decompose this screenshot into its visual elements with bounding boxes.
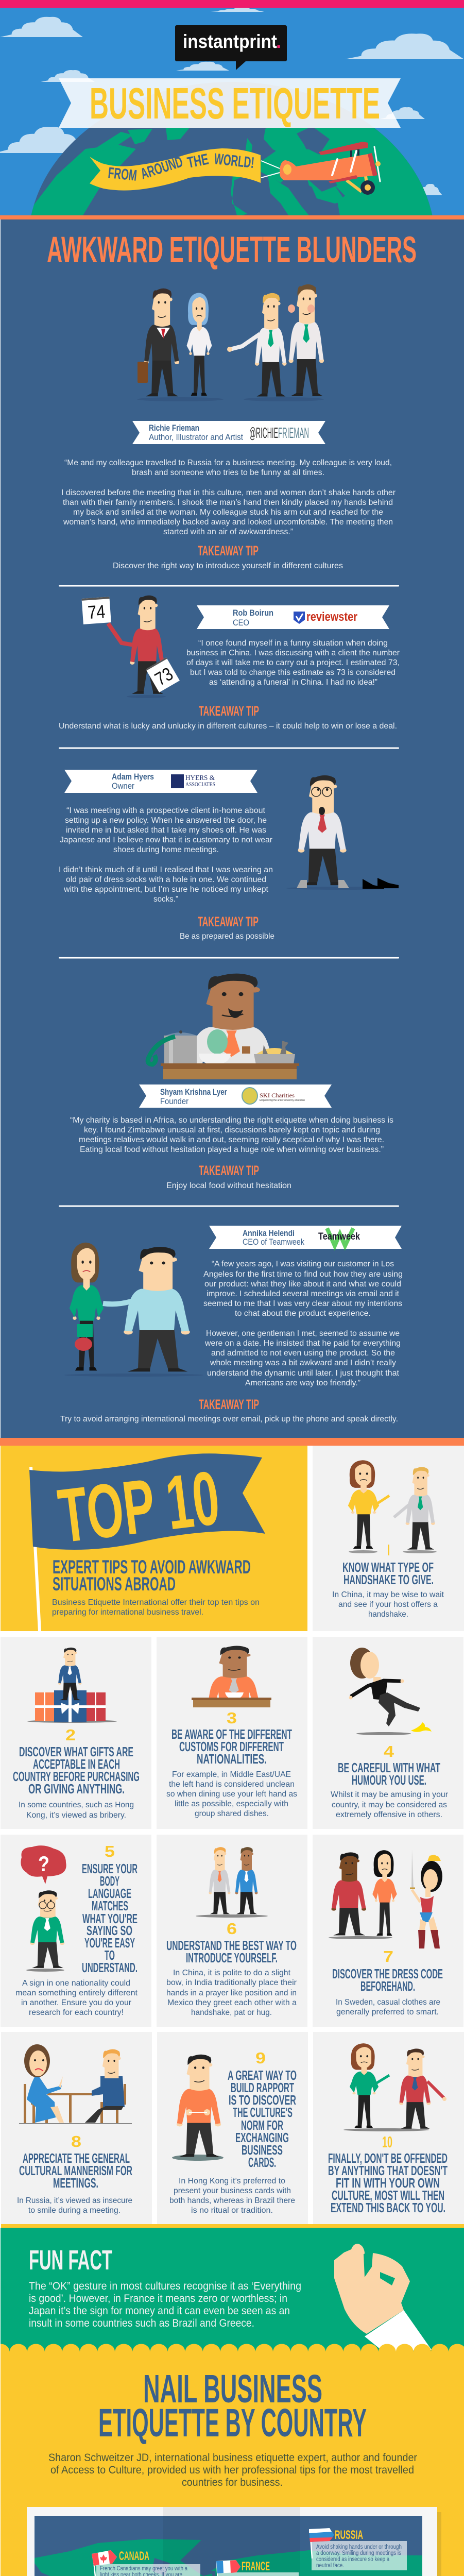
subtitle flag: from around the world: FROM — [107, 164, 138, 184]
map callout: Russia: RUSSIA — [335, 2528, 363, 2542]
panel: tip 5 body language: BODY — [100, 1873, 119, 1889]
text: OK gesture fact: The “OK” gesture in most cultures recognise it as ‘Everything — [29, 2280, 301, 2292]
map frame with shadow — [27, 2507, 441, 2576]
takeaway tip 2: TAKEAWAY TIP — [199, 703, 259, 719]
panel: tip 3 customs: the left hand is considered unclean — [169, 1780, 295, 1789]
text: Sharon Schweitzer intro: Sharon Schweitzer JD, international business etiquette expert, author and founder — [48, 2452, 417, 2464]
panel: tip 5 body language: A sign in one nationality could — [22, 1979, 130, 1988]
heading: nail business etiquette by country: NAIL BUSINESS — [143, 2367, 322, 2411]
panel: tip 5 body language: YOU'RE EASY — [84, 1935, 135, 1951]
quote: Richie Frieman: brash and someone who tries to be funny at all times. — [132, 468, 324, 477]
panel: tip 8 mannerism: APPRECIATE THE GENERAL — [23, 2150, 130, 2166]
panel: tip 3 customs: little as possible, especially with — [175, 1800, 288, 1808]
illustration: woman and leaning man — [64, 1243, 203, 1377]
quote: Rob Boirun — [186, 639, 400, 687]
panel: tip 9 business cards: 9 — [255, 2049, 266, 2067]
quote: Annika Helendi: understand the dynamic until later. I just thought that — [207, 1369, 400, 1378]
section divider: orange — [0, 1438, 464, 1446]
quote: Annika Helendi: However, one gentleman I met, seemed to assume we — [206, 1329, 400, 1338]
ribbon: Richie Frieman: @RICHIE — [249, 425, 278, 442]
panel: tip 2 gifts: 2 — [65, 1726, 76, 1744]
panel: tip 9 business cards: BUILD RAPPORT — [231, 2080, 294, 2095]
quote: Annika Helendi: and admitted to not even using the product. So the — [211, 1349, 395, 1358]
panel: tip 9 business cards: In Hong Kong it’s preferred to — [179, 2177, 285, 2185]
panel: tip 9 business cards: EXCHANGING — [235, 2130, 289, 2145]
map: world map — [35, 2516, 422, 2576]
ribbon: Adam Hyers: Owner — [112, 782, 134, 791]
text: OK gesture fact: Japan it’s the sign for money and it can even be seen as an — [29, 2305, 290, 2317]
subtitle flag: from around the world — [90, 148, 261, 191]
panel: tip 2 gifts: DISCOVER WHAT GIFTS ARE — [19, 1744, 133, 1759]
quote: Adam Hyers: invited me in but asked that I take my shoes off. He was — [66, 826, 266, 835]
panel: tip 5 body language: mean something entirely different — [15, 1989, 138, 1997]
panel: tip 9 business cards: CARDS. — [248, 2155, 276, 2170]
quote: Rob Boirun: business in China. I was discussing with a client the number — [186, 649, 400, 657]
quote: Annika Helendi: our product: what they like about it and what we could — [204, 1280, 401, 1289]
quote: Richie Frieman: “Me and my colleague travelled to Russia for a business meeting. My colleague is very loud, — [64, 459, 392, 467]
takeaway tip 4: Enjoy local food without hesitation — [166, 1181, 291, 1190]
panel: tip 9 business cards: A GREAT WAY TO — [228, 2067, 297, 2083]
text: expert tips intro: SITUATIONS ABROAD — [53, 1573, 176, 1595]
panel: tip 6 introduce: handshake, pat or hug. — [191, 2008, 272, 2017]
map callout: Canada — [92, 2549, 200, 2576]
panel: tip 3 customs: For example, in Middle East/UAE — [172, 1770, 291, 1779]
quote: Annika Helendi: seemed to me that I was very clear about my intentions — [203, 1299, 402, 1308]
panel: fun fact background — [1, 2228, 464, 2351]
panel: tip 8 mannerism: 8 — [71, 2132, 81, 2150]
panel: tip 2 gifts — [1, 1637, 151, 1829]
panel: tip 6 introduce: hands in a prayer like position and in — [166, 1989, 297, 1997]
illustration: man holding calendars 74 and 73 — [81, 596, 180, 698]
panel: tip 3 customs — [157, 1637, 307, 1829]
panel: tip 4 humour — [313, 1637, 463, 1829]
text: expert tips intro — [52, 1556, 260, 1617]
panel: tip 9 business cards: IS TO DISCOVER — [229, 2092, 296, 2108]
panel: tip 9 business cards: both hands, whereas in Brazil there — [169, 2196, 295, 2205]
logo: instantprint speech bubble — [175, 25, 287, 70]
logo: instantprint speech bubble: . — [276, 31, 281, 52]
panel: tip 4 humour: Whilst it may be amusing in your — [331, 1790, 448, 1799]
ribbon: Shyam Krishna Lyer: SKI Charities — [260, 1092, 295, 1099]
ribbon: Richie Frieman: Richie Frieman — [149, 423, 199, 433]
map callout: Russia: Avoid shaking hands under or through — [316, 2544, 402, 2550]
panel: tip 9 business cards — [157, 2032, 308, 2224]
quote: Richie Frieman: I discovered before the meeting that in this culture, men and women don’t shake hands other — [61, 488, 396, 497]
quote: Shyam Krishna Lyer: meetings relatives would walk in and out, seeming really sceptical of why I was there. — [79, 1136, 384, 1144]
panel: tip 7 dress code: 7 — [383, 1947, 393, 1965]
panel: tip 8 mannerism: to smile during a meeting. — [28, 2206, 121, 2215]
ribbon: Adam Hyers: HYERS & — [185, 774, 215, 782]
quote: Shyam Krishna Lyer: Eating local food without hesitation played a huge role when winning over business.” — [80, 1145, 384, 1154]
panel: tip 5 body language: ENSURE YOUR — [82, 1861, 138, 1876]
flag: top 10: TOP 10 — [54, 1455, 224, 1559]
panel: tip 4 humour: 4 — [384, 1742, 394, 1760]
ribbon: Rob Boirun: reviewster — [306, 610, 357, 624]
takeaway tip 1: Discover the right way to introduce yourself in different cultures — [113, 562, 343, 570]
hero: sky background with clouds — [0, 8, 464, 216]
quote: Rob Boirun: of days it will take me to carry out a project. I estimated 73, — [186, 658, 400, 667]
panel: tip 9 business cards: is no ritual or tradition. — [191, 2206, 273, 2215]
panel: tip 7 dress code: generally preferred to smart. — [336, 2008, 439, 2016]
ribbon: Adam Hyers: ASSOCIATES — [185, 781, 215, 788]
takeaway tip 1: TAKEAWAY TIP — [198, 543, 259, 558]
quote: Annika Helendi: were on a date. He insisted that he paid for everything — [204, 1339, 401, 1348]
icon: biplane — [261, 142, 381, 195]
panel: tip 4 humour: country, it may be considered as — [332, 1801, 447, 1809]
panel: tip 2 gifts: OR GIVING ANYTHING. — [28, 1781, 125, 1797]
text: Sharon Schweitzer intro — [48, 2452, 417, 2488]
panel: tip 3 customs: NATIONALITIES. — [197, 1751, 267, 1767]
quote: Adam Hyers: setting up a new policy. When he answered the door, he — [65, 816, 267, 825]
quote: Adam Hyers — [59, 806, 273, 904]
ribbon: Rob Boirun — [197, 605, 389, 629]
ribbon: Rob Boirun: CEO — [233, 618, 249, 628]
heading: nail business etiquette by country — [98, 2367, 367, 2445]
panel: tip 6 introduce — [157, 1835, 307, 2027]
quote: Annika Helendi: to chat about the product experience. — [235, 1309, 371, 1318]
map callout: France — [216, 2560, 299, 2576]
quote: Rob Boirun: “I once found myself in a funny situation when doing — [198, 639, 388, 648]
panel: tip 1 handshake: In China, it may be wise to wait — [332, 1590, 444, 1599]
icon: OK hand gesture — [334, 2244, 432, 2352]
panel: tip 7 dress code: In Sweden, casual clothes are — [336, 1998, 440, 2007]
takeaway tip 3 — [180, 914, 274, 941]
panel: tip 8 mannerism: MEETINGS. — [53, 2175, 98, 2191]
quote: Annika Helendi: Angeles for the first time to find out how they are using — [203, 1270, 403, 1279]
ribbon: Adam Hyers: Adam Hyers — [112, 772, 154, 782]
panel: tip 10 don't be offended — [313, 2032, 464, 2224]
quote: Rob Boirun: as ‘attending a funeral’ in China. I had no idea!” — [209, 678, 377, 687]
panel: tip 9 business cards: present your business cards with — [174, 2187, 291, 2195]
map callout: Russia: neutral face. — [316, 2563, 344, 2569]
section divider: yellow — [1, 2224, 464, 2228]
panel: tip 5 body language — [1, 1835, 151, 2027]
panel: tip 3 customs: BE AWARE OF THE DIFFERENT — [171, 1726, 292, 1742]
quote: Adam Hyers: old pair of dress socks with a hole in one. We continued — [66, 875, 266, 884]
text: OK gesture fact: insult in some countries such as Brazil and Greece. — [29, 2317, 254, 2329]
quote: Rob Boirun: but I was told to change this estimate as 73 is considered — [190, 668, 396, 677]
panel: tip 5 body language: SAYING SO — [87, 1923, 132, 1938]
quote: Adam Hyers: socks.” — [153, 895, 178, 904]
panel: tip 2 gifts: ACCEPTABLE IN EACH — [33, 1756, 120, 1772]
illustration: man in socks with shoes off — [286, 775, 400, 890]
heading: fun fact: FUN FACT — [29, 2245, 112, 2276]
panel: tip 6 introduce: Mexico they greet each other with a — [167, 1998, 297, 2007]
text: OK gesture fact — [29, 2280, 301, 2329]
panel: tip 5 body language: UNDERSTAND. — [82, 1960, 138, 1975]
ribbon: Shyam Krishna Lyer: Founder — [160, 1097, 188, 1106]
ribbon: Annika Helendi — [209, 1226, 402, 1249]
quote: Richie Frieman: than with their family members. I shook the man’s hand then kindly placed my hands behind — [63, 498, 393, 507]
quote: Richie Frieman: woman’s hand, who immediately backed away and looked uncomfortable. The meeting then — [63, 518, 393, 527]
panel: nail business etiquette background — [1, 2344, 464, 2576]
ribbon: Shyam Krishna Lyer: Empowering the underserved by education — [260, 1099, 305, 1102]
panel: tip 2 gifts: COUNTRY BEFORE PURCHASING — [13, 1769, 140, 1784]
takeaway tip 2: Understand what is lucky and unlucky in different cultures – it could help to win or lose a deal. — [59, 722, 397, 731]
takeaway tip 4 — [166, 1163, 291, 1190]
takeaway tip 5: Try to avoid arranging international meetings over email, pick up the phone and speak directly. — [60, 1415, 398, 1423]
text: expert tips intro: preparing for international business travel. — [52, 1608, 203, 1617]
map callout: Russia — [309, 2528, 407, 2570]
quote: Shyam Krishna Lyer — [70, 1116, 393, 1154]
quote: Annika Helendi: whole meeting was a bit awkward and I didn’t really — [210, 1359, 396, 1367]
section divider: orange — [0, 215, 464, 219]
panel: tip 4 humour: extremely offensive in others. — [336, 1810, 442, 1819]
ribbon: Annika Helendi: CEO of Teamweek — [243, 1238, 305, 1247]
ribbon: Annika Helendi: Teamweek — [318, 1231, 360, 1242]
panel: tip 1 handshake — [313, 1446, 464, 1631]
panel: tip 9 business cards: THE CULTURE'S — [233, 2105, 293, 2120]
quote: Richie Frieman — [61, 459, 396, 536]
ribbon: Rob Boirun: Rob Boirun — [233, 608, 273, 618]
panel: tip 8 mannerism: CULTURAL MANNERISM FOR — [19, 2163, 132, 2178]
map callout: Canada: CANADA — [119, 2549, 149, 2563]
quote: Adam Hyers: shoes during home meetings. — [113, 845, 219, 854]
panel: tip 5 body language: LANGUAGE — [88, 1886, 131, 1901]
map callout: Russia: a doorway. Smiling during meetings is — [316, 2550, 401, 2556]
logo: instantprint speech bubble: instantprint — [183, 31, 277, 52]
text: expert tips intro: EXPERT TIPS TO AVOID AWKWARD — [53, 1556, 251, 1578]
panel: tip 8 mannerism: In Russia, it’s viewed as insecure — [17, 2196, 132, 2205]
flag: top 10 — [29, 1453, 265, 1559]
panel: tip 1 handshake: handshake. — [368, 1610, 408, 1619]
quote: Adam Hyers: with the appointment, but I’m sure he noticed my unkept — [63, 885, 269, 894]
panel: tip 9 business cards: NORM FOR — [241, 2117, 283, 2133]
panel: tip 6 introduce: 6 — [227, 1920, 237, 1938]
quote: Adam Hyers: Japanese and I believe now that it is customary to not wear — [60, 836, 272, 844]
illustration: man holding calendars 74 and 73: 74 — [87, 601, 106, 623]
panel: tip 8 mannerism — [1, 2032, 152, 2224]
ribbon: Shyam Krishna Lyer — [139, 1084, 332, 1108]
panel: tip 6 introduce: In China, it is polite to do a slight — [173, 1969, 291, 1977]
ribbon: Richie Frieman: FRIEMAN — [278, 425, 309, 442]
subtitle flag: from around the world: WORLD! — [213, 150, 255, 172]
panel: tip 5 body language: in another. Ensure you do your — [21, 1998, 131, 2007]
illustration: man holding calendars 74 and 73: 73 — [151, 663, 177, 690]
panel: tip 7 dress code: BEFOREHAND. — [360, 1978, 415, 1994]
quote: Adam Hyers: I didn’t think much of it until I realised that I was wearing an — [59, 866, 273, 874]
quote: Annika Helendi: “A few years ago, I was visiting our customer in Los — [212, 1260, 394, 1268]
ribbon: Richie Frieman — [132, 421, 325, 444]
quote: Shyam Krishna Lyer: key. I found Zimbabwe unusual at first, discussions barely kept on topic and during — [84, 1126, 380, 1134]
panel: tip 5 body language: research for each country! — [29, 2008, 124, 2017]
takeaway tip 5: TAKEAWAY TIP — [199, 1397, 259, 1412]
text: expert tips intro: Business Etiquette International offer their top ten tips on — [52, 1598, 260, 1607]
panel: tip 5 body language: ? — [38, 1852, 49, 1876]
panel: tip 3 customs: CUSTOMS FOR DIFFERENT — [179, 1739, 284, 1754]
ribbon: Annika Helendi: Annika Helendi — [243, 1229, 295, 1238]
takeaway tip 4: TAKEAWAY TIP — [199, 1163, 259, 1178]
quote: Annika Helendi — [203, 1260, 403, 1387]
ribbon: Adam Hyers — [64, 770, 257, 793]
quote: Richie Frieman: started with an air of awkwardness.” — [163, 528, 293, 536]
quote: Annika Helendi: Americans are way too friendly.” — [245, 1379, 360, 1387]
panel: tip 5 body language: TO — [105, 1947, 115, 1963]
panel: tip 3 customs: group shared dishes. — [195, 1809, 269, 1818]
panel: tip 6 introduce: UNDERSTAND THE BEST WAY TO — [166, 1938, 297, 1953]
ribbon: Richie Frieman: Author, Illustrator and Artist — [149, 433, 243, 442]
panel: tip 1 handshake: and see if your host offers a — [338, 1600, 438, 1609]
illustration: four business people — [137, 284, 324, 401]
quote: Adam Hyers: “I was meeting with a prospective client in-home about — [66, 806, 266, 815]
panel: tip 6 introduce: bow, in India traditionally place their — [166, 1978, 297, 1987]
panel: tip 3 customs: so when dining use your left hand as — [166, 1790, 297, 1799]
map callout: Canada: French Canadians may greet you with a — [100, 2566, 187, 2572]
subtitle flag: from around the world: AROUND — [139, 153, 185, 183]
panel: top 10 intro — [1, 1446, 307, 1631]
takeaway tip 1 — [113, 543, 343, 570]
takeaway tip 3: Be as prepared as possible — [180, 932, 274, 941]
panel: tip 6 introduce: INTRODUCE YOURSELF. — [186, 1950, 278, 1965]
takeaway tip 5 — [60, 1397, 398, 1423]
ribbon: Shyam Krishna Lyer: Shyam Krishna Lyer — [160, 1088, 227, 1097]
panel: tip 5 body language: MATCHES — [92, 1898, 128, 1913]
panel: tip 5 body language: 5 — [105, 1842, 115, 1860]
panel: tip 2 gifts: In some countries, such as Hong — [19, 1801, 134, 1809]
panel: tip 3 customs: 3 — [227, 1709, 237, 1727]
panel: tip 10 don't be offended: 10 — [382, 2133, 392, 2151]
text: Sharon Schweitzer intro: countries for business. — [182, 2477, 283, 2488]
illustration: man eating local food at table — [145, 974, 299, 1079]
panel: tip 9 business cards: BUSINESS — [242, 2142, 283, 2158]
takeaway tip 2 — [59, 703, 397, 731]
hero: globe — [21, 77, 443, 215]
text: OK gesture fact: is good’. However, in France it means zero or worthless; in — [29, 2293, 287, 2304]
quote: Shyam Krishna Lyer: “My charity is based in Africa, so understanding the right etiquette when doing business is — [70, 1116, 393, 1125]
panel: tip 7 dress code — [313, 1835, 463, 2027]
panel: awkward etiquette blunders background — [1, 219, 464, 1438]
takeaway tip 3: TAKEAWAY TIP — [198, 914, 259, 929]
panel: tip 2 gifts: Kong, it’s viewed as bribery. — [26, 1811, 126, 1820]
text: Sharon Schweitzer intro: of Access to Culture, provided us with her professional tips for the most travelled — [50, 2464, 414, 2476]
subtitle flag: from around the world: THE — [186, 151, 210, 172]
quote: Richie Frieman: my back and smiled at the woman. My colleague stuck his arm out and reached for the — [73, 508, 383, 517]
header: pink strip — [0, 0, 464, 8]
map callout: France: FRANCE — [242, 2560, 270, 2573]
map callout: Russia: considered as insecure so keep a — [316, 2556, 389, 2563]
panel: tip 5 body language: WHAT YOU'RE — [82, 1911, 138, 1926]
quote: Annika Helendi: improve. I scheduled several meetings via email and it — [207, 1290, 400, 1298]
